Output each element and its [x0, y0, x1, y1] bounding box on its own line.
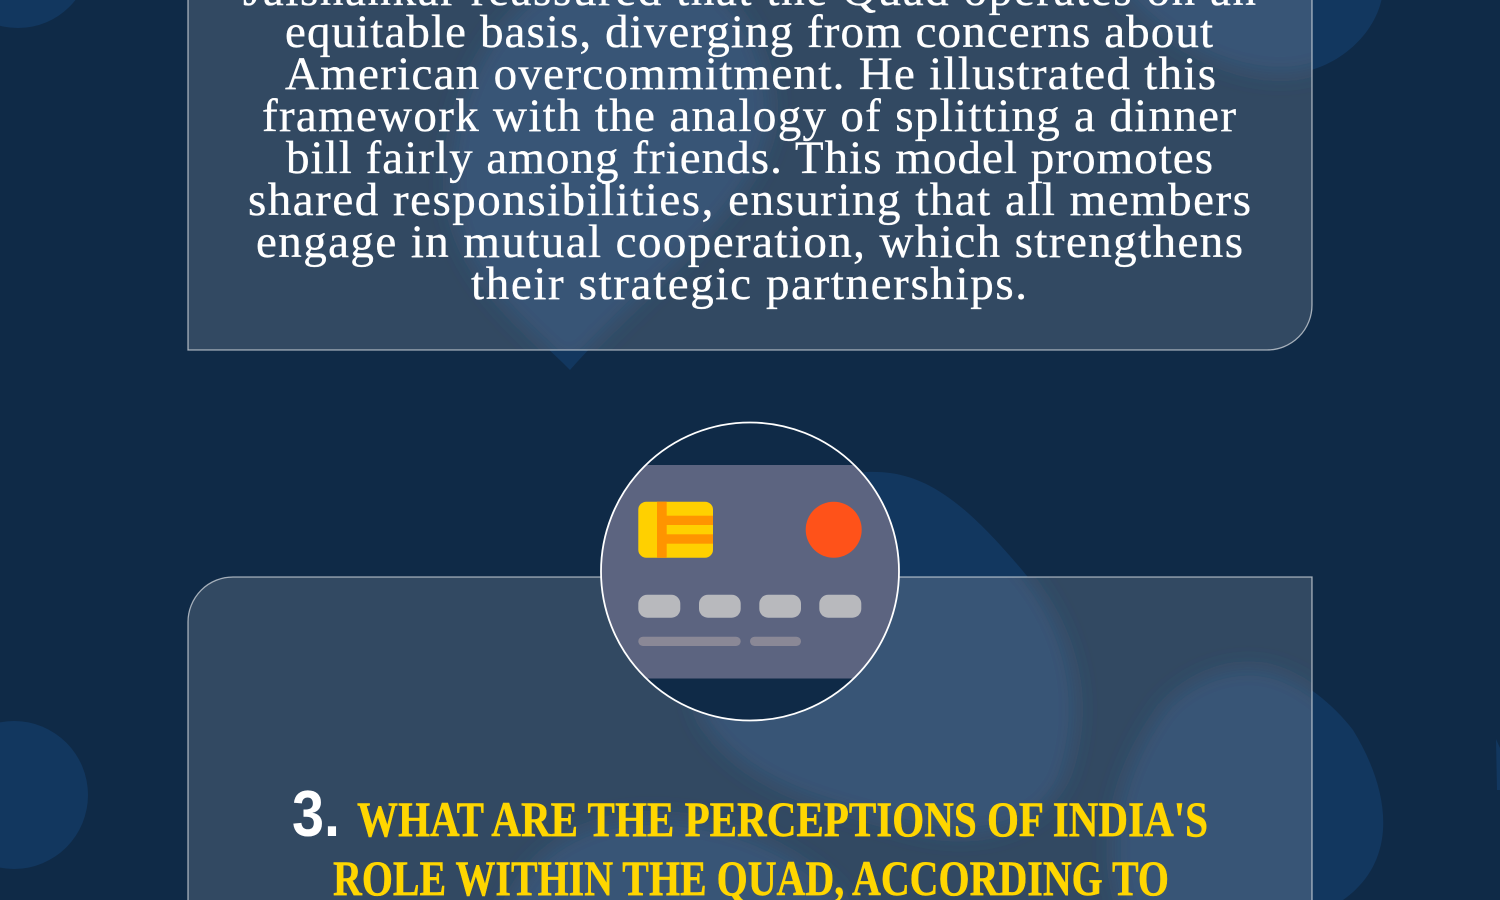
body text: bill fairly among friends. This model promotes — [286, 132, 1213, 184]
card number pills — [638, 595, 861, 618]
panel: question 3 — [187, 576, 1313, 900]
card small lines — [638, 637, 801, 646]
card chip — [638, 502, 713, 558]
body text: American overcommitment. He illustrated this — [285, 48, 1216, 100]
icon: credit card in circle — [590, 422, 910, 720]
card logo dot — [806, 502, 862, 558]
card body — [590, 465, 910, 678]
body text: their strategic partnerships. — [471, 258, 1027, 310]
body text: equitable basis, diverging from concerns about — [285, 6, 1213, 58]
body text: engage in mutual cooperation, which strengthens — [256, 216, 1243, 268]
body text — [243, 0, 1256, 310]
heading: question 3 — [292, 777, 1208, 900]
body text: framework with the analogy of splitting a dinner — [262, 90, 1236, 142]
heading: question 3: WHAT ARE THE PERCEPTIONS OF INDIA'S — [357, 791, 1208, 847]
panel: answer to question 2 — [187, 0, 1313, 351]
body text: shared responsibilities, ensuring that all members — [248, 174, 1251, 226]
heading: question 3: 3. — [292, 777, 340, 850]
